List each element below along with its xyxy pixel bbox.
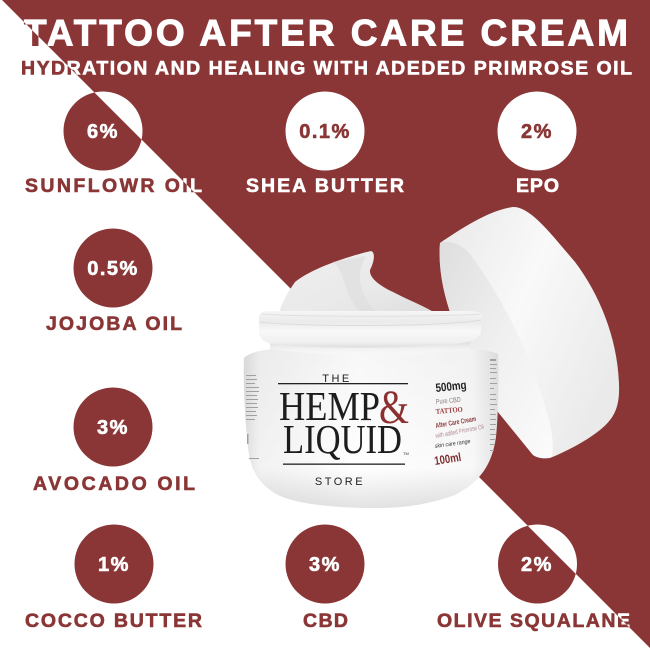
percentage circle 3%: 3% xyxy=(97,417,129,439)
label sunflowr oil: SUNFLOWR OIL xyxy=(25,175,202,197)
percentage circle 2% olive: 2% xyxy=(521,554,553,576)
jar lid xyxy=(440,207,619,458)
label cocco butter: COCCO BUTTER xyxy=(25,610,202,632)
jar rim xyxy=(259,311,482,348)
label olive squalane: OLIVE SQUALANE xyxy=(437,610,630,632)
product details: with added Primrose Oil xyxy=(434,424,485,440)
brand logo: STORE xyxy=(315,476,365,488)
percentage circle 6%: 6% xyxy=(87,121,119,143)
percentage circle 3% CBD: 3% xyxy=(309,554,341,576)
label EPO: EPO xyxy=(516,175,559,197)
title xyxy=(24,19,626,46)
label CBD: CBD xyxy=(303,610,348,632)
percentage circle 6% xyxy=(64,92,142,170)
product details: After Care Cream xyxy=(435,416,477,430)
jar body xyxy=(244,349,498,508)
percentage circle 0.1%: 0.1% xyxy=(299,121,351,143)
product details: Pure CBD xyxy=(436,397,461,406)
product details: 500mg xyxy=(435,378,467,395)
ingredient: jojoba oil 0.5% xyxy=(46,228,182,335)
label avocado oil: AVOCADO OIL xyxy=(33,473,195,495)
title: TATTOO AFTER CARE CREAM xyxy=(24,12,628,54)
brand logo: HEMP xyxy=(279,383,380,429)
brand logo xyxy=(278,373,409,488)
ingredient: EPO 2% xyxy=(498,92,576,197)
ingredient: CBD 3% xyxy=(286,524,364,632)
percentage circle 0.5%: 0.5% xyxy=(87,258,139,280)
percentage circle 1% xyxy=(74,524,154,604)
percentage circle 1%: 1% xyxy=(98,554,130,576)
product details: skin care range xyxy=(434,439,471,450)
ingredient: shea butter 0.1% xyxy=(246,92,404,197)
label sunflowr oil xyxy=(25,178,202,192)
brand logo: & xyxy=(379,381,409,434)
label shea butter: SHEA BUTTER xyxy=(246,175,404,197)
ingredient: avocado oil 3% xyxy=(33,388,195,495)
subtitle: HYDRATION AND HEALING WITH ADEDED PRIMROSE OIL xyxy=(21,58,632,80)
ingredient: cocco butter 1% xyxy=(25,524,202,632)
product: open jar with lid xyxy=(244,207,619,508)
brand logo: LIQUID xyxy=(283,416,402,462)
label jojoba oil: JOJOBA OIL xyxy=(46,313,182,335)
ingredient: sunflower oil 6% xyxy=(25,92,202,197)
brand logo: THE xyxy=(322,373,352,385)
product details xyxy=(433,378,485,468)
brand logo: TM xyxy=(403,451,409,456)
jar neck xyxy=(270,338,470,360)
cream swirl xyxy=(278,251,440,316)
title: TATTOO AFTER CARE CREAM xyxy=(24,12,628,54)
product details: 100ml xyxy=(433,450,462,468)
percentage circle 3% xyxy=(74,388,152,466)
jar side small print right xyxy=(490,359,497,451)
subtitle: HYDRATION AND HEALING WITH ADEDED PRIMROSE OIL xyxy=(21,58,632,80)
product details: TATTOO xyxy=(435,405,463,416)
label sunflowr oil: SUNFLOWR OIL xyxy=(25,175,202,197)
percentage circle 2%: 2% xyxy=(521,121,553,143)
percentage circle 0.1% xyxy=(286,92,364,170)
jar side small print left xyxy=(246,375,259,459)
subtitle xyxy=(22,60,632,75)
label olive squalane: OLIVE SQUALANE xyxy=(437,610,630,632)
percentage circle 2% olive xyxy=(498,524,577,604)
ingredient: olive squalane 2% xyxy=(437,524,630,632)
